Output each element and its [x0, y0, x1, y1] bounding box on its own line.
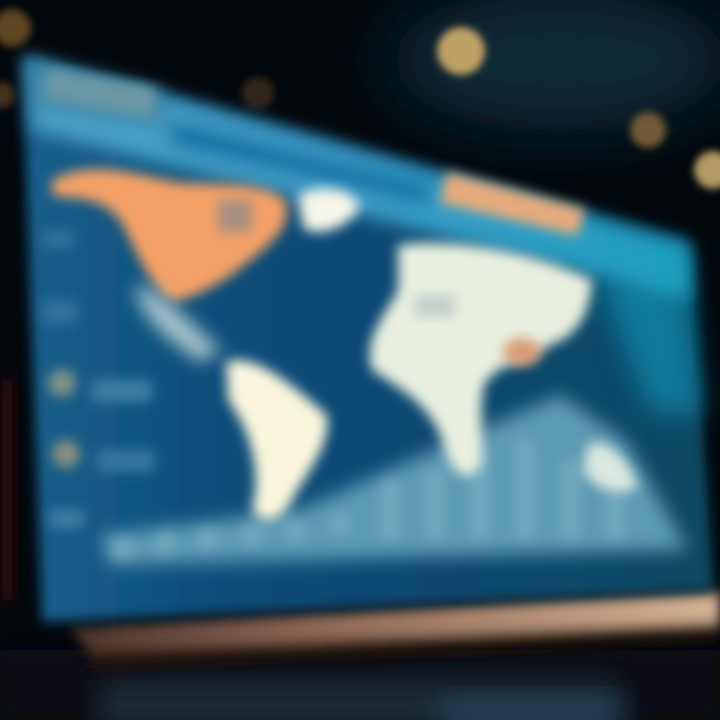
- bokeh lights: [0, 9, 720, 189]
- shelf: display bottom edge: [70, 592, 720, 668]
- orange label: [440, 172, 585, 236]
- continent: Australia: [583, 443, 638, 492]
- header band: [26, 56, 690, 300]
- continent: Eurasia and Africa: [370, 243, 592, 475]
- header title smudge: [43, 69, 157, 117]
- continent: Central America: [135, 285, 222, 362]
- continent: North America: [52, 169, 287, 302]
- label on Eurasia: [415, 295, 455, 317]
- legend: left column markers: [42, 230, 155, 528]
- map marker on Asia: [503, 338, 541, 366]
- map marker on North America: [218, 200, 252, 232]
- panel: right side teal area: [600, 262, 700, 415]
- continent: South America: [226, 360, 328, 520]
- panel: map screen: [22, 55, 714, 622]
- continent: Greenland: [298, 188, 360, 232]
- panel: bottom dot grid area: [100, 395, 688, 565]
